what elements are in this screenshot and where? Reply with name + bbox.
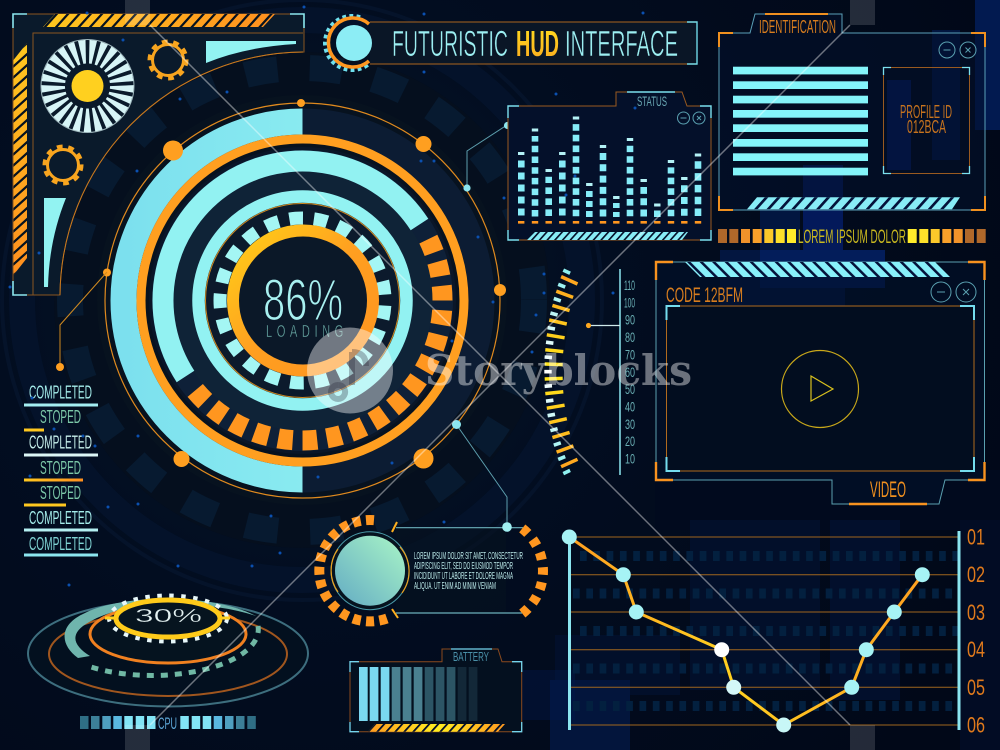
lorem strip — [718, 227, 986, 248]
panel: info orb: LOREM IPSUM DOLOR SIT AMET, CONSECTETUR — [414, 551, 523, 562]
equalizer caps — [518, 116, 701, 206]
orange segments — [115, 113, 490, 488]
window buttons — [678, 112, 705, 124]
info text — [414, 551, 523, 592]
graph line — [569, 537, 922, 725]
identification label: IDENTIFICATION — [759, 17, 836, 37]
scale numbers: 90 — [625, 312, 635, 328]
percent label: 86% — [263, 268, 343, 333]
graph labels: 01 — [967, 524, 985, 549]
status rows: COMPLETED — [29, 507, 92, 528]
panel: status equalizer — [508, 92, 711, 240]
battery label: BATTERY — [453, 649, 489, 664]
orb — [331, 532, 409, 610]
graph labels: 03 — [967, 600, 985, 625]
text: 100 — [624, 294, 635, 310]
scale numbers: 30 — [625, 416, 635, 432]
scale numbers — [624, 277, 635, 467]
outer cyan half arc — [124, 122, 482, 480]
video screen — [666, 306, 974, 471]
second cyan arc — [110, 108, 495, 493]
icon: title orb — [314, 5, 390, 81]
status hatch — [527, 232, 688, 240]
equalizer bars — [521, 124, 698, 217]
cpu orange ring — [90, 605, 246, 663]
info text: ALIQUA. UT ENIM AD MINIM VENIAM — [414, 581, 496, 592]
icon: sun dial — [41, 40, 134, 132]
graph labels: 05 — [967, 675, 985, 700]
scale numbers: 10 — [625, 451, 635, 467]
scale numbers: 50 — [625, 381, 635, 397]
cpu strip — [80, 714, 256, 733]
panel: battery — [350, 649, 522, 732]
cyan segments — [213, 211, 392, 390]
orange ticks left — [305, 506, 435, 635]
orange ticks right — [413, 495, 565, 647]
text: 110 — [624, 277, 635, 293]
title text: FUTURISTIC — [392, 23, 508, 64]
orange ring — [141, 139, 464, 462]
cpu yellow ticks — [105, 616, 230, 620]
id bars — [733, 67, 868, 175]
chart: line graph — [562, 524, 985, 738]
watermark: Storyblocks — [425, 346, 692, 395]
scattered blue dots — [8, 6, 644, 586]
top hatch stripe — [43, 14, 275, 27]
status rows: COMPLETED — [29, 432, 92, 452]
status rows: COMPLETED — [29, 382, 92, 402]
battery bars — [359, 667, 477, 721]
lorem strip: LOREM IPSUM DOLOR — [798, 227, 906, 248]
chart: main radial gauge — [103, 99, 506, 498]
panel: info orb — [305, 495, 565, 647]
scale numbers: 20 — [625, 433, 635, 449]
chart: cpu dial — [28, 596, 308, 706]
connector: info — [452, 420, 507, 527]
graph labels: 04 — [967, 637, 985, 662]
scale numbers: 40 — [625, 398, 635, 414]
cpu arc band — [65, 599, 256, 658]
code label: CODE 12BFM — [666, 284, 743, 307]
graph labels: 02 — [967, 562, 985, 587]
scale numbers: 80 — [625, 329, 635, 345]
graph points — [562, 530, 930, 732]
cpu percent: 30% — [135, 606, 202, 626]
panel: identification — [719, 14, 985, 210]
info text: INCIDIDUNT UT LABORE ET DOLORE MAGNA — [414, 571, 513, 582]
loading ring — [233, 230, 373, 370]
video corners — [656, 262, 984, 504]
profile box — [884, 68, 970, 174]
chart: vertical scale — [544, 269, 635, 475]
status rows — [24, 382, 98, 556]
icon: gear top — [150, 42, 186, 78]
watermark — [125, 0, 875, 750]
profile box: 012BCA — [907, 117, 946, 137]
cpu white ticks — [109, 596, 227, 642]
status rows: STOPED — [40, 406, 81, 427]
window buttons — [931, 282, 976, 302]
title text: HUD — [516, 23, 559, 64]
panel: video — [656, 262, 984, 504]
video label: VIDEO — [870, 477, 906, 502]
inner thin ring — [206, 204, 400, 398]
title text: INTERFACE — [565, 23, 678, 64]
curved ticks short — [544, 270, 570, 474]
panel: top-left corner frame — [13, 14, 304, 295]
panel: info orb: ADIPISCING ELIT, SED DO EIUSMOD TEMPOR — [414, 561, 513, 572]
battery hatch — [368, 724, 505, 732]
left hatch stripe — [14, 43, 27, 275]
graph axes — [570, 530, 959, 730]
scale numbers: 70 — [625, 346, 635, 362]
status rows: COMPLETED — [29, 533, 92, 554]
scale numbers: 60 — [625, 364, 635, 380]
profile box: PROFILE ID — [900, 102, 952, 122]
graph labels — [967, 524, 985, 738]
scale axis — [619, 269, 621, 475]
graph labels: 06 — [967, 712, 985, 738]
window buttons — [939, 42, 976, 58]
icon: play — [782, 350, 858, 428]
id hatch — [747, 197, 960, 209]
cpu ticks — [91, 626, 258, 675]
connector: status — [463, 122, 511, 192]
title banner — [314, 5, 697, 81]
equalizer base — [518, 221, 701, 224]
status rows: STOPED — [40, 457, 81, 478]
status rows: STOPED — [40, 482, 81, 503]
scale pointer — [586, 323, 620, 328]
status label: STATUS — [637, 93, 667, 109]
loading label: LOADING — [266, 321, 348, 342]
gauge nodes — [103, 99, 506, 468]
graph dash rows — [573, 556, 958, 706]
graph grid — [570, 537, 959, 725]
wedge: left — [44, 198, 66, 287]
cpu yellow ring — [116, 600, 220, 637]
video hatch — [685, 262, 950, 277]
cpu strip: CPU — [158, 714, 177, 733]
wedge: top — [206, 41, 296, 63]
inner cyan ring — [198, 196, 406, 404]
curved ticks long — [545, 277, 578, 467]
icon: gear left — [45, 147, 81, 183]
connector: left node — [56, 272, 107, 371]
panel: status list — [24, 382, 98, 556]
